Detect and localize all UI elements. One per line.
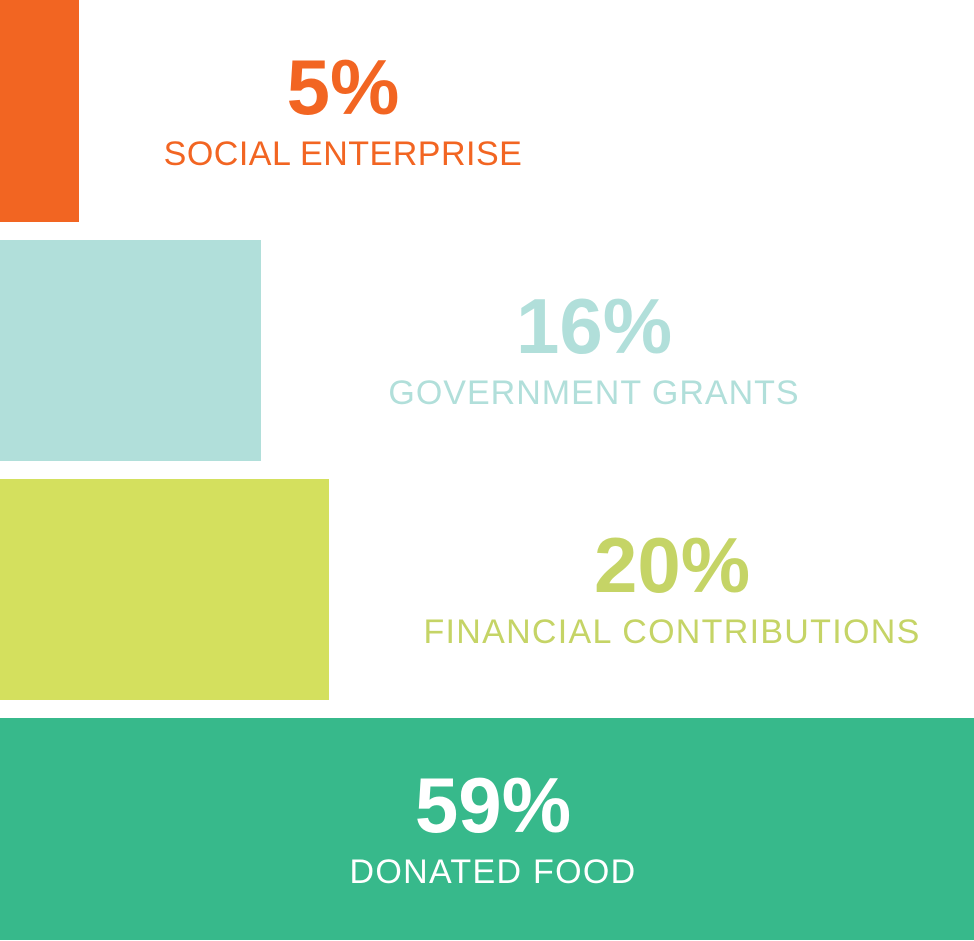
label: 20% financial contributions: FINANCIAL CONTRIBUTIONS xyxy=(423,613,921,651)
label: 59% donated food xyxy=(350,761,636,891)
label: 59% donated food: 59% xyxy=(415,761,571,849)
bar: financial contributions xyxy=(0,479,329,700)
label: 59% donated food: DONATED FOOD xyxy=(350,853,636,891)
bar: government grants xyxy=(0,240,261,461)
label: 20% financial contributions xyxy=(423,521,921,651)
label: 5% social enterprise: 5% xyxy=(287,43,399,131)
bar: social enterprise xyxy=(0,0,79,222)
label: 5% social enterprise xyxy=(164,43,522,173)
label: 5% social enterprise: SOCIAL ENTERPRISE xyxy=(164,135,522,173)
label: 16% government grants: GOVERNMENT GRANTS xyxy=(388,374,800,412)
label: 16% government grants xyxy=(388,282,800,412)
label: 16% government grants: 16% xyxy=(516,282,672,370)
bar: donated food xyxy=(0,718,974,940)
label: 20% financial contributions: 20% xyxy=(594,521,750,609)
